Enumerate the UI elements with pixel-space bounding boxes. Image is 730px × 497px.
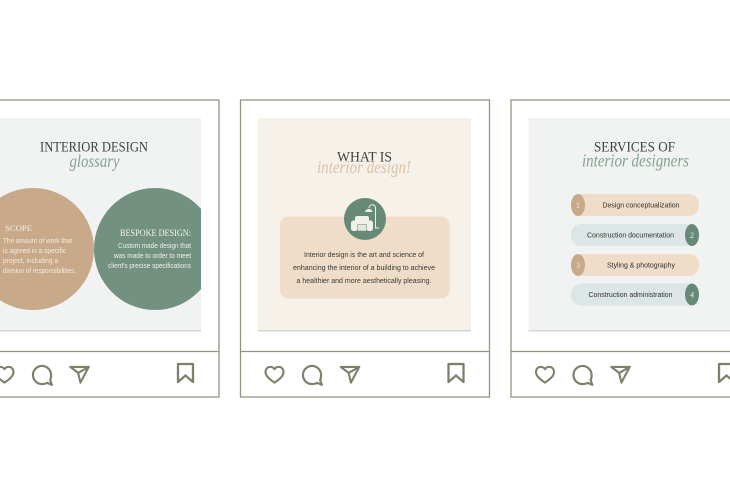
list item 1: Design conceptualization <box>602 200 680 210</box>
icon: heart <box>266 367 284 383</box>
circle: scope: is agreed in a specific <box>3 246 66 255</box>
list item 4: Construction administration <box>588 290 672 299</box>
icon: comment <box>573 366 592 385</box>
icon: bookmark <box>178 364 193 382</box>
card shadow <box>258 330 471 332</box>
icon: send <box>611 367 630 383</box>
list item 3 <box>571 254 699 276</box>
list item 4 <box>571 284 699 306</box>
circle: scope: division of responsibilities. <box>3 266 76 275</box>
circle: bespoke design: was made to order to meet <box>113 251 191 260</box>
icon: bookmark <box>448 364 464 382</box>
icon: comment <box>33 366 52 385</box>
heading script: interior design: interior design! <box>317 157 411 177</box>
divider <box>511 350 730 352</box>
icon: armchair and lamp <box>344 198 386 240</box>
description text <box>293 250 435 285</box>
icon: comment <box>303 366 322 385</box>
list item 2 <box>571 224 699 246</box>
heading: interior design: INTERIOR DESIGN <box>40 140 148 156</box>
list item 4: 4 <box>690 290 694 300</box>
list item 3: 3 <box>576 261 580 270</box>
heading script: glossary: glossary <box>70 151 120 171</box>
action icons <box>536 364 730 385</box>
circle: scope: The amount of work that <box>3 236 72 245</box>
list item 2: Construction documentation <box>587 230 674 240</box>
circle: bespoke design <box>94 188 201 310</box>
icon: send <box>70 367 89 383</box>
divider <box>0 350 219 352</box>
icon: bookmark <box>719 364 730 382</box>
heading script: interior designers: interior designers <box>582 150 689 170</box>
circle: bespoke design: client's precise specifications <box>108 261 191 270</box>
action icons <box>0 364 193 385</box>
icon: heart <box>0 367 14 383</box>
circle: scope: project, including a <box>3 256 58 265</box>
services card <box>528 118 730 330</box>
list item 1: 1 <box>576 201 580 210</box>
heading: what is: WHAT IS <box>337 150 392 166</box>
description text: a healthier and more aesthetically pleasing. <box>296 276 432 285</box>
beige card <box>258 118 471 330</box>
list item 2: 2 <box>690 231 694 240</box>
icon: send <box>341 367 359 383</box>
heading: services of: SERVICES OF <box>594 140 675 156</box>
card shadow <box>528 330 730 332</box>
description text: enhancing the interior of a building to achieve <box>293 263 435 272</box>
post frame <box>511 100 730 397</box>
circle: bespoke design: BESPOKE DESIGN: <box>120 229 191 239</box>
list item 1 <box>571 194 699 216</box>
panel: glossary post <box>0 100 219 397</box>
icon: heart <box>536 367 554 383</box>
glossary card <box>0 118 201 330</box>
circle: scope: SCOPE <box>5 223 32 233</box>
list item 3: Styling & photography <box>607 260 675 270</box>
circle: bespoke design: Custom made design that <box>118 241 191 250</box>
text box <box>280 216 450 298</box>
description text: Interior design is the art and science of <box>304 250 425 259</box>
post frame <box>240 100 490 397</box>
post frame <box>0 100 219 397</box>
divider <box>240 350 490 352</box>
panel: what is interior design post <box>240 100 490 397</box>
card shadow <box>0 330 201 332</box>
circle: scope <box>0 188 94 310</box>
action icons <box>266 364 464 385</box>
panel: services post <box>511 100 730 397</box>
